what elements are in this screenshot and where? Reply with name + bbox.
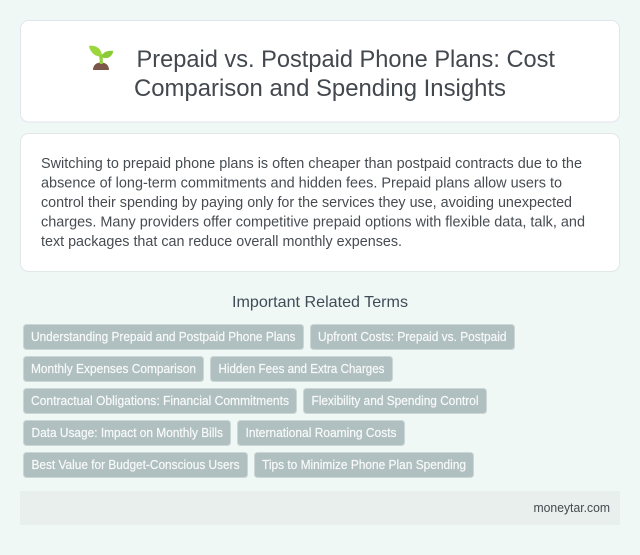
panel: description [20,134,620,272]
tag: international roaming [238,420,404,446]
title: Prepaid vs. Postpaid Phone Plans: Cost [136,46,555,73]
tag: hidden fees: Hidden Fees and Extra Charges [218,362,384,376]
tag: tips: Tips to Minimize Phone Plan Spending [262,458,466,472]
tag: best value: Best Value for Budget-Conscious Users [32,458,240,472]
tag: upfront costs [310,324,514,350]
description text: control their spending by paying only for the services they use, avoiding unexpected [41,195,572,211]
title: Comparison and Spending Insights [134,75,506,102]
tag: understanding plans: Understanding Prepaid and Postpaid Phone Plans [31,330,296,344]
description text: Switching to prepaid phone plans is often cheaper than postpaid contracts due to the [41,156,582,172]
panel: related term tags [24,324,514,478]
title [134,46,555,102]
tag: hidden fees [210,356,392,382]
tag: flexibility: Flexibility and Spending Control [312,394,478,408]
tag: understanding plans [24,324,304,350]
tag: data usage: Data Usage: Impact on Monthly Bills [32,426,223,440]
description text: text packages that can reduce overall monthly expenses. [41,234,402,250]
tag: contractual obligations [24,388,296,414]
description text: absence of long-term commitments and hidden fees. Prepaid plans allow users to [41,176,562,192]
panel: title card [20,20,620,122]
footer [20,491,620,525]
heading: related terms: Important Related Terms [232,294,408,311]
tag: upfront costs: Upfront Costs: Prepaid vs. Postpaid [318,330,506,344]
tag: flexibility [304,388,486,414]
tag: tips [254,452,474,478]
description text: charges. Many providers offer competitive prepaid options with flexible data, talk, and [41,214,585,230]
tag: monthly expenses [24,356,204,382]
tag: monthly expenses: Monthly Expenses Comparison [31,362,196,376]
tag: best value [24,452,248,478]
icon: seedling [89,46,113,70]
description text [41,156,585,250]
tag: contractual obligations: Contractual Obligations: Financial Commitments [31,394,289,408]
footer source text: moneytar.com [534,501,610,515]
tag: international roaming: International Roaming Costs [246,426,396,440]
tag: data usage [24,420,230,446]
